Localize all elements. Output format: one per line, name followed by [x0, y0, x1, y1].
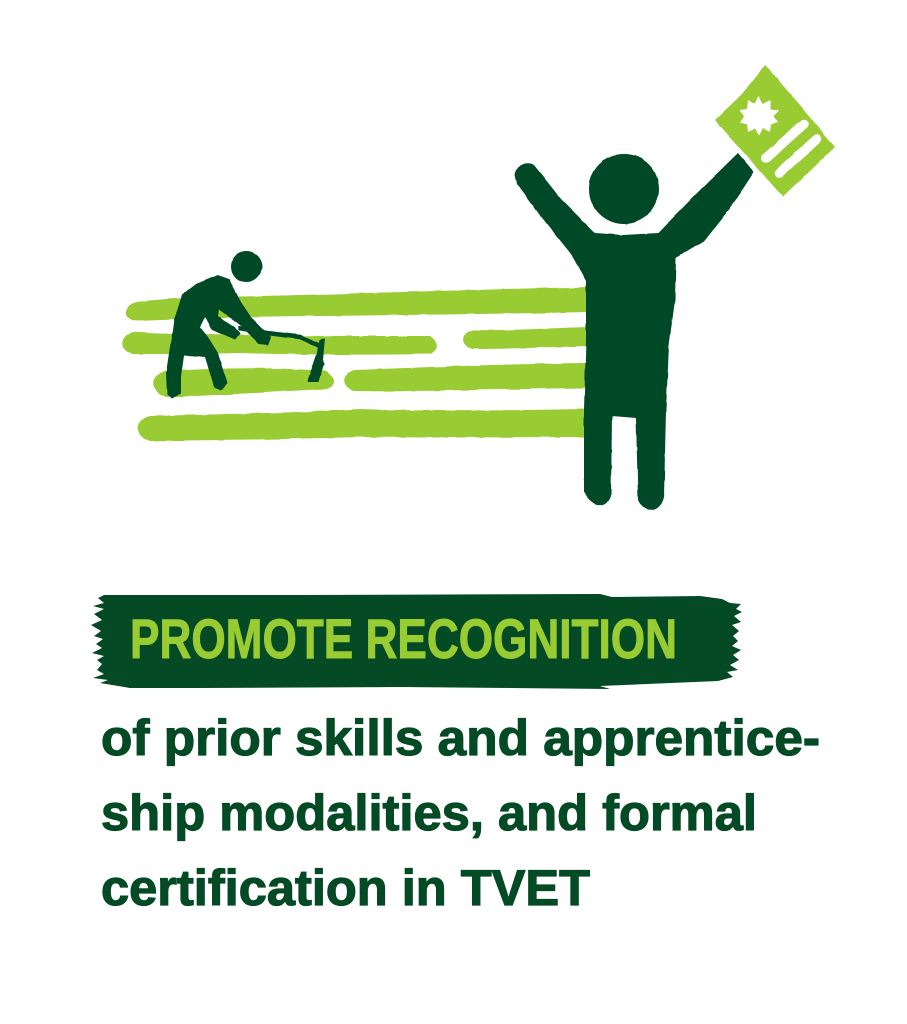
certificate seal: [740, 96, 779, 135]
illustration: green field strokes: [122, 287, 590, 441]
worker head: [231, 251, 262, 282]
banner heading text: PROMOTE RECOGNITION: [130, 607, 677, 670]
certificate lines: [766, 124, 817, 173]
body text: [101, 710, 820, 916]
icon: certificate: [715, 65, 835, 197]
person head: [589, 154, 659, 224]
worker body: [166, 275, 271, 398]
body text line 2: ship modalities, and formal: [101, 785, 757, 841]
body text line 1: of prior skills and apprentice-: [101, 710, 820, 766]
icon: worker with hoe: [166, 251, 325, 398]
person body and raised arms: [515, 153, 754, 510]
hoe blade: [307, 338, 325, 382]
banner brush stroke: [91, 594, 742, 689]
icon: celebrating person: [515, 153, 754, 510]
hoe handle: [238, 328, 322, 347]
body text line 3: certification in TVET: [101, 860, 590, 916]
heading banner: [91, 594, 742, 689]
certificate sheet: [715, 65, 835, 197]
